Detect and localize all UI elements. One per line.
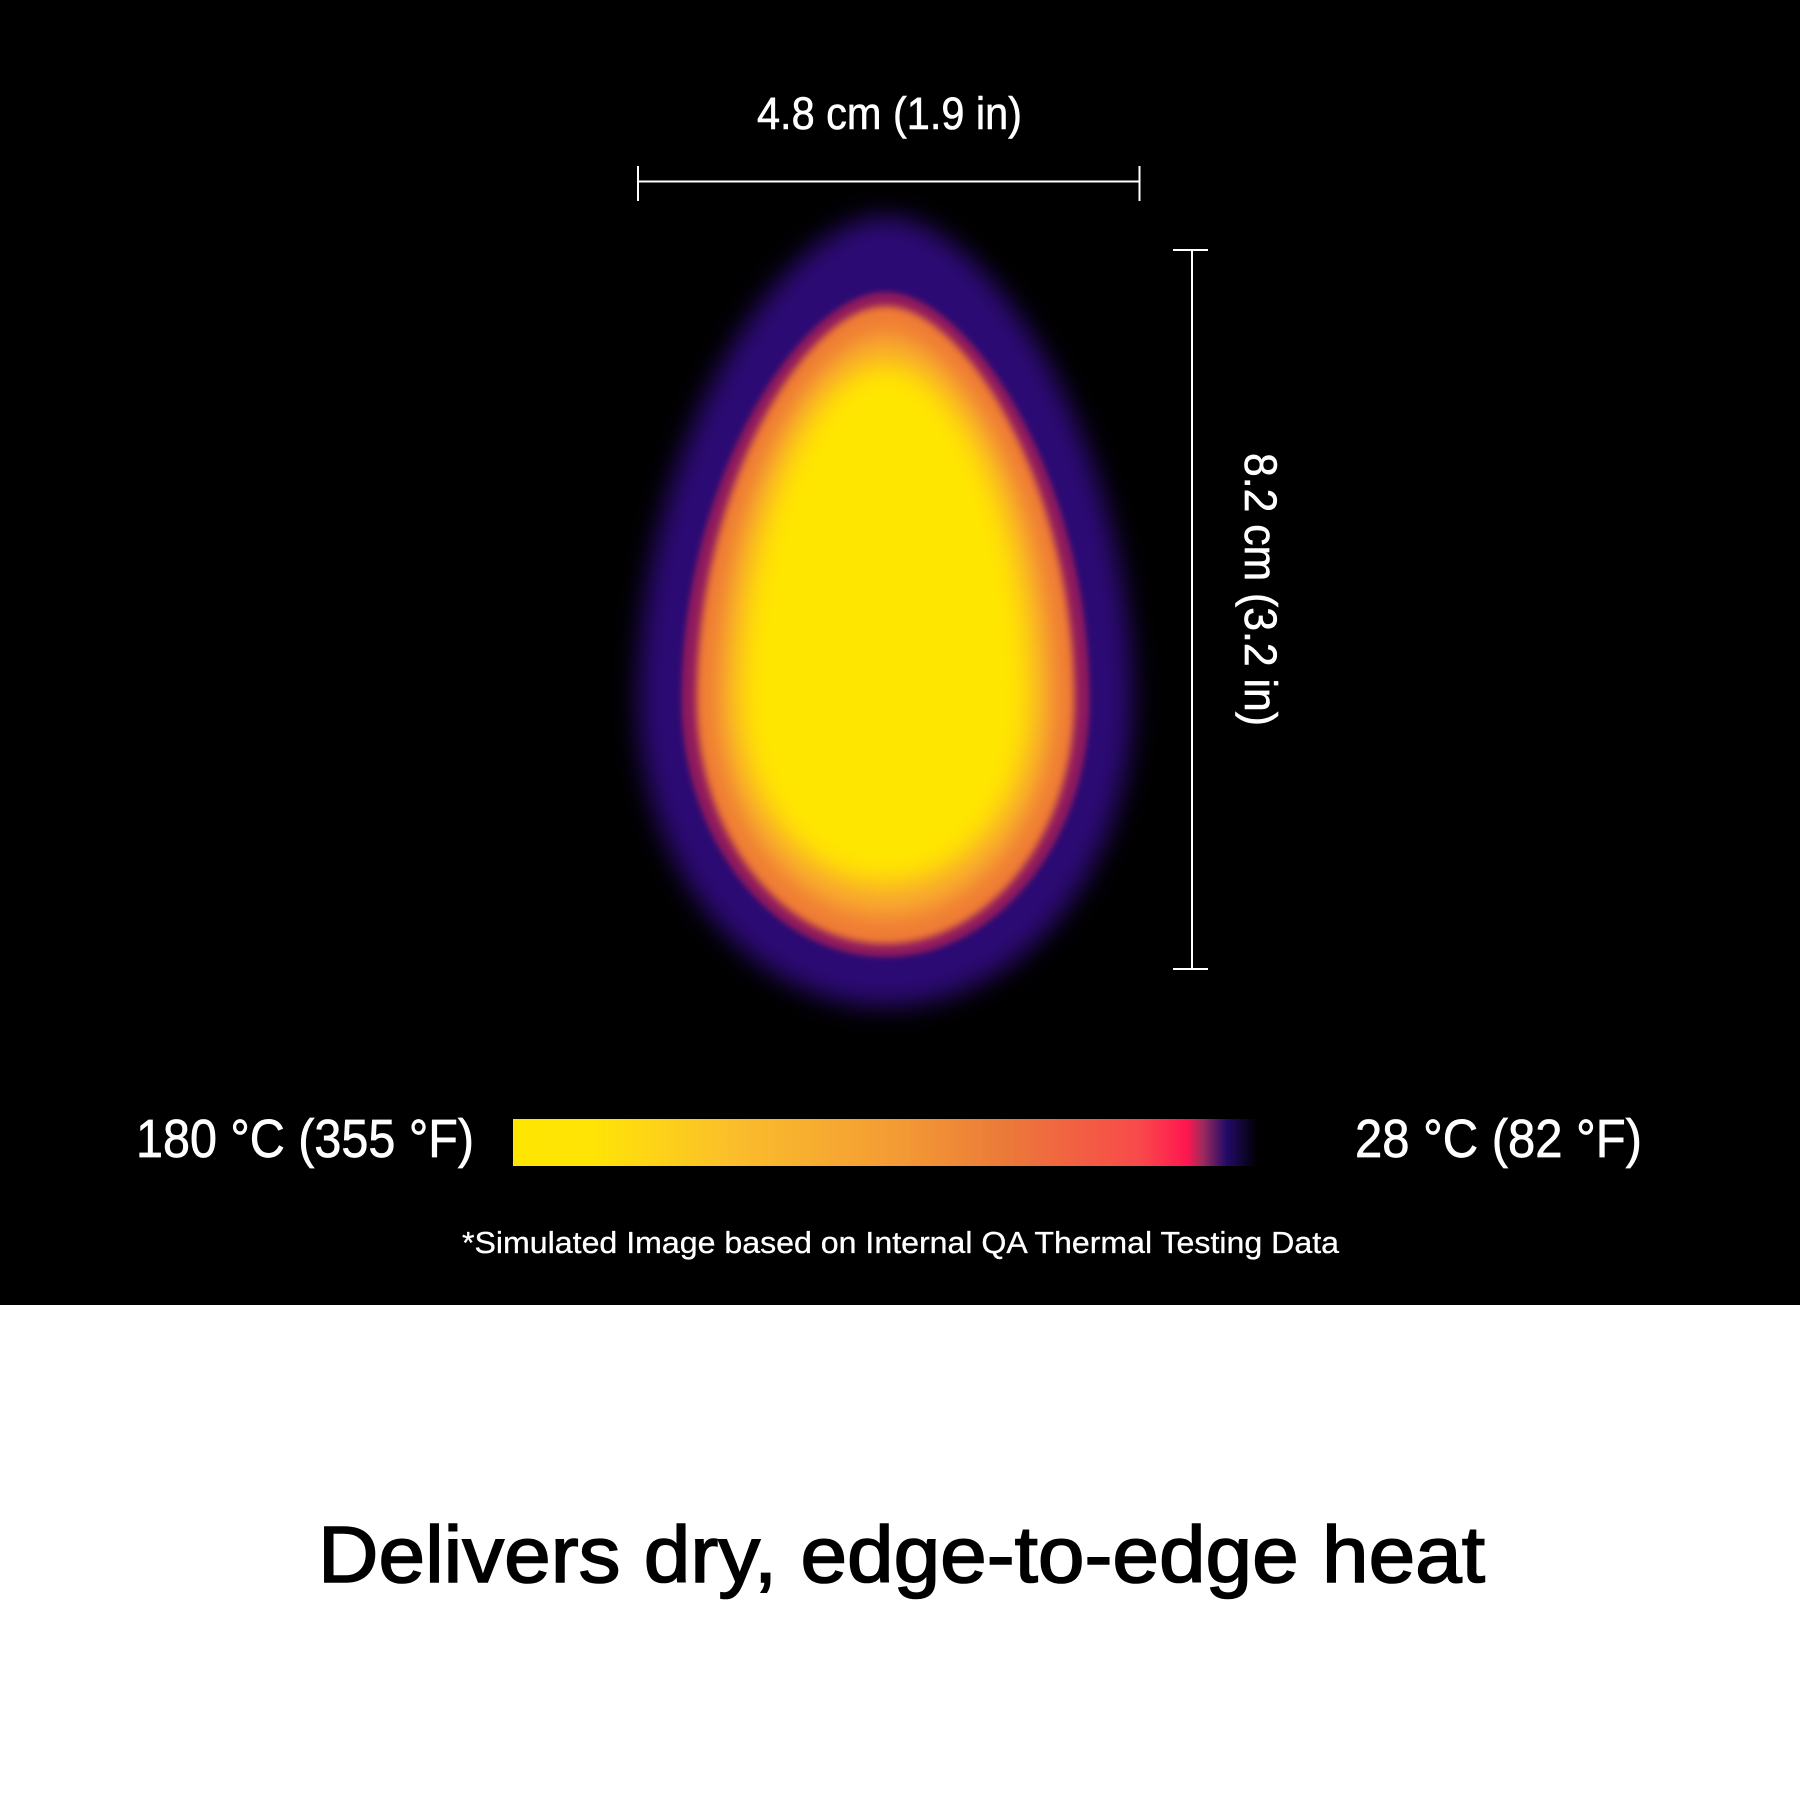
legend: maximum temperature label: 180 °C (355 °F) <box>136 1109 474 1169</box>
chart: egg-shaped heat map <box>638 216 1132 1006</box>
legend: minimum temperature label: 28 °C (82 °F) <box>1355 1109 1642 1169</box>
width measurement label: 4.8 cm (1.9 in) <box>757 88 1022 139</box>
panel: black thermal image background <box>0 0 1800 1305</box>
height measurement label: 8.2 cm (3.2 in) <box>1235 453 1286 726</box>
footnote: *Simulated Image based on Internal QA Thermal Testing Data <box>462 1225 1340 1260</box>
heading: Delivers dry, edge-to-edge heat <box>318 1510 1485 1599</box>
height dimension bracket <box>1173 250 1208 969</box>
panel: white caption background <box>0 1305 1800 1800</box>
width dimension bracket <box>638 166 1140 201</box>
legend: temperature colour scale bar <box>513 1119 1258 1166</box>
